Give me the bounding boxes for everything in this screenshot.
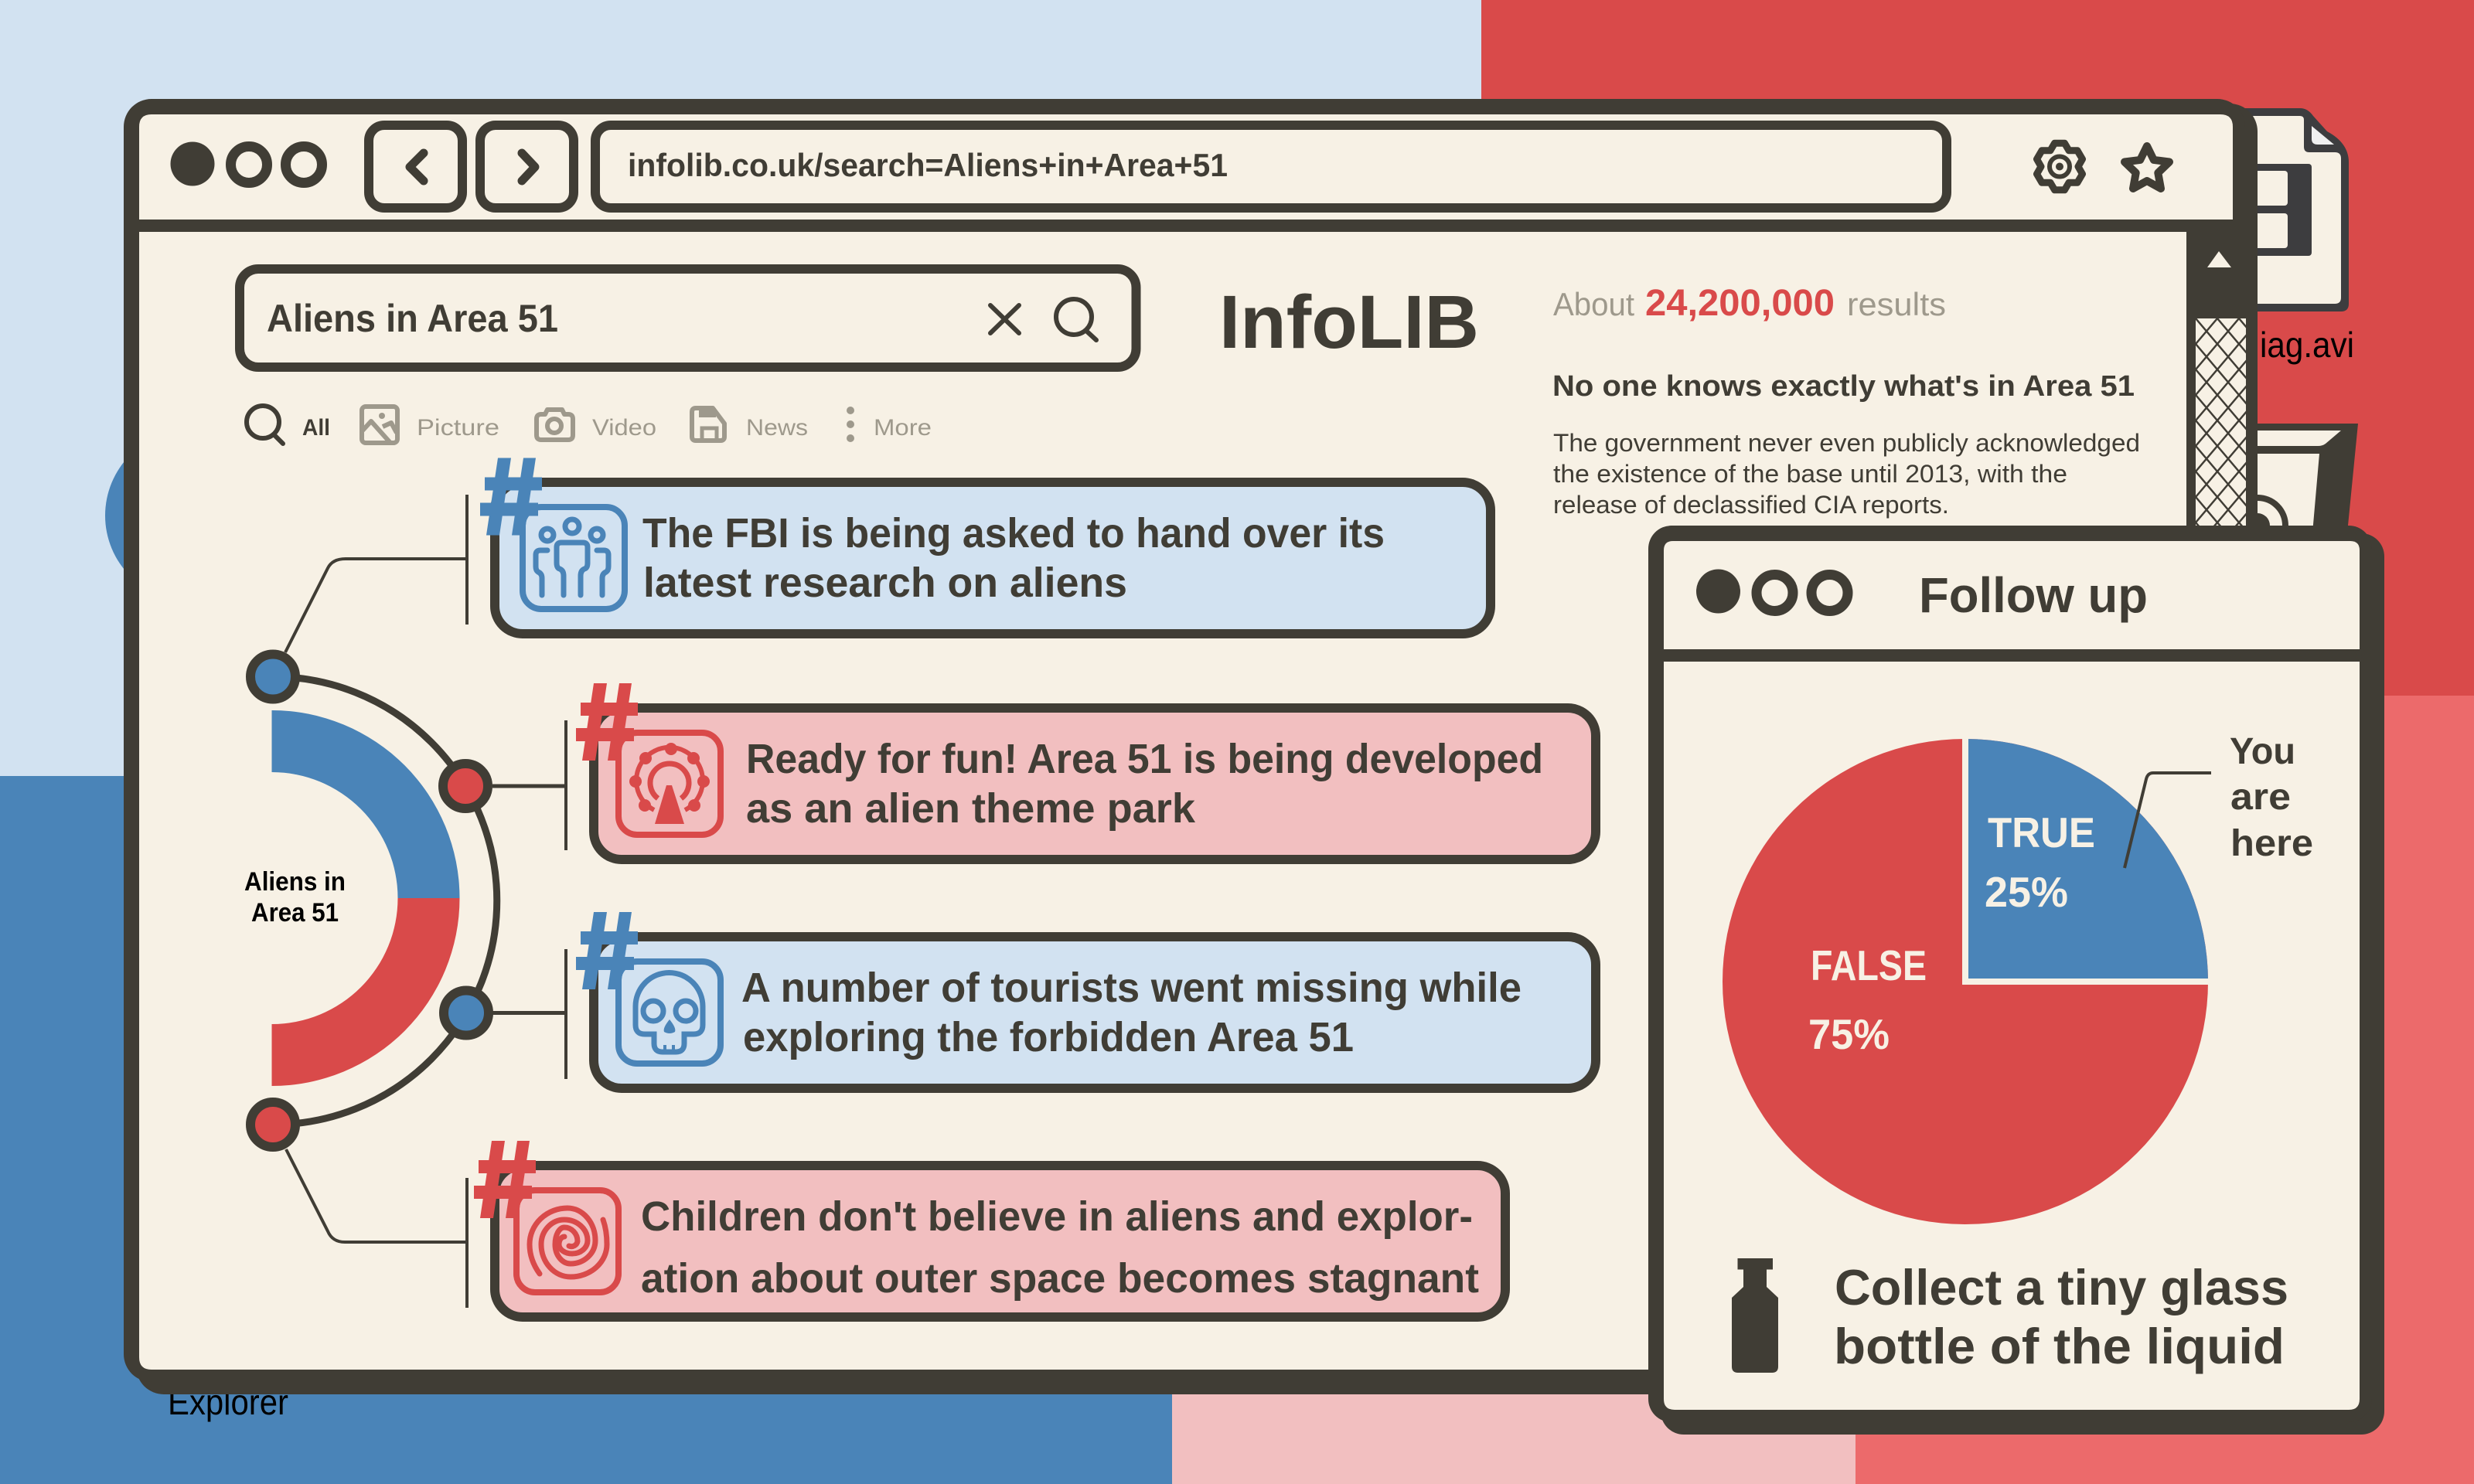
- result count: results: [1847, 286, 1946, 322]
- search filter tabs: News: [746, 415, 808, 441]
- pie chart: 25%: [1985, 868, 2068, 916]
- callout: you are here: here: [2230, 823, 2313, 864]
- search filter tabs: All: [302, 415, 330, 441]
- half donut diagram: [244, 710, 459, 1086]
- follow up message: [1834, 1259, 2288, 1374]
- result count: About: [1553, 286, 1634, 322]
- result heading: No one knows exactly what's in Area 51: [1552, 370, 2135, 403]
- result description: [1553, 429, 2140, 519]
- pie chart: 75%: [1808, 1010, 1890, 1058]
- card: missing tourists: [576, 912, 1596, 1088]
- pie chart: TRUE: [1988, 808, 2095, 856]
- search filter tabs: Video: [592, 415, 656, 441]
- icon: video file behind browser: [2227, 108, 2349, 311]
- header background: [1664, 541, 2360, 649]
- toolbar background: [139, 114, 2233, 220]
- hash mark: [480, 458, 542, 535]
- icon: video camera: [537, 410, 573, 440]
- half donut diagram: Area 51: [251, 898, 339, 928]
- window control dots: [1696, 569, 1848, 614]
- icon: skull: [618, 962, 721, 1064]
- logo: InfoLIB: [1219, 280, 1479, 364]
- card: FBI research: latest research on aliens: [643, 560, 1127, 606]
- icon: news save disk: [692, 408, 724, 441]
- search box: Aliens in Area 51: [267, 297, 558, 340]
- card text: A number of tourists went missing while: [741, 965, 1522, 1011]
- half donut diagram: Aliens in: [244, 867, 346, 897]
- scrollbar: [2186, 232, 2258, 541]
- search filter tabs: More: [874, 415, 932, 441]
- card: children and exploration: [474, 1141, 1505, 1317]
- connector arc and leader lines: [273, 495, 566, 1308]
- card: FBI research: [480, 458, 1491, 634]
- icon: favourite star: [2125, 146, 2169, 189]
- card text: Ready for fun! Area 51 is being developed: [746, 736, 1543, 782]
- card: alien theme park: [576, 683, 1596, 859]
- hash mark: [474, 1141, 536, 1218]
- body background: [1664, 662, 2360, 1410]
- address bar: [595, 125, 1947, 208]
- window shadow: [1661, 533, 2384, 1435]
- card: alien theme park: as an alien theme park: [746, 785, 1196, 832]
- result description: The government never even publicly acknowledged: [1553, 429, 2140, 457]
- pie chart: [1723, 734, 2211, 1224]
- callout: you are here: You: [2230, 731, 2295, 772]
- follow up message: bottle of the liquid: [1834, 1318, 2285, 1374]
- search box: [240, 269, 1136, 367]
- panel: browser window: [124, 99, 2258, 1394]
- search filter tabs: Picture: [417, 415, 499, 441]
- back button: [369, 125, 462, 208]
- blue circle behind browser: [105, 430, 277, 601]
- icon: group of people: [523, 507, 625, 609]
- address bar: infolib.co.uk/search=Aliens+in+Area+51: [628, 147, 1228, 183]
- search filter tabs: [247, 406, 932, 444]
- window shadow: [136, 104, 2258, 1394]
- card: children and exploration: ation about outer space becomes stagnant: [641, 1255, 1479, 1302]
- window frame: [124, 99, 2245, 1382]
- result description: release of declassified CIA reports.: [1553, 491, 1949, 519]
- icon: recycle bin behind browser: [2227, 424, 2358, 553]
- result description: the existence of the base until 2013, with the: [1553, 460, 2067, 488]
- page background: [139, 232, 2186, 1370]
- forward button: [480, 125, 574, 208]
- icon: settings gear: [2036, 143, 2083, 190]
- window frame: [1648, 526, 2372, 1422]
- follow up message: Collect a tiny glass: [1835, 1259, 2288, 1316]
- result count: [1553, 283, 1946, 324]
- panel: follow up window: [1648, 526, 2384, 1435]
- icon: all search: [247, 406, 283, 444]
- icon: glass bottle: [1732, 1258, 1778, 1373]
- callout: you are here: are: [2230, 777, 2291, 818]
- hash mark: [576, 912, 638, 989]
- callout: you are here: [2125, 731, 2313, 868]
- card text: The FBI is being asked to hand over its: [642, 510, 1385, 556]
- card: missing tourists: exploring the forbidden Area 51: [743, 1014, 1354, 1060]
- pie chart: FALSE: [1811, 941, 1927, 989]
- window title: Follow up: [1919, 567, 2148, 623]
- icon: picture: [362, 407, 397, 443]
- result count: 24,200,000: [1645, 283, 1835, 324]
- icon: more dots: [847, 407, 854, 442]
- file label: iag.avi: [2260, 325, 2354, 365]
- connector nodes: [250, 654, 489, 1147]
- card text: Children don't believe in aliens and explor-: [641, 1193, 1473, 1240]
- desktop label: Explorer: [168, 1382, 288, 1422]
- icon: spiral: [516, 1190, 618, 1292]
- hash mark: [576, 683, 638, 761]
- window control dots: [170, 142, 322, 186]
- icon: ferris wheel: [618, 733, 721, 835]
